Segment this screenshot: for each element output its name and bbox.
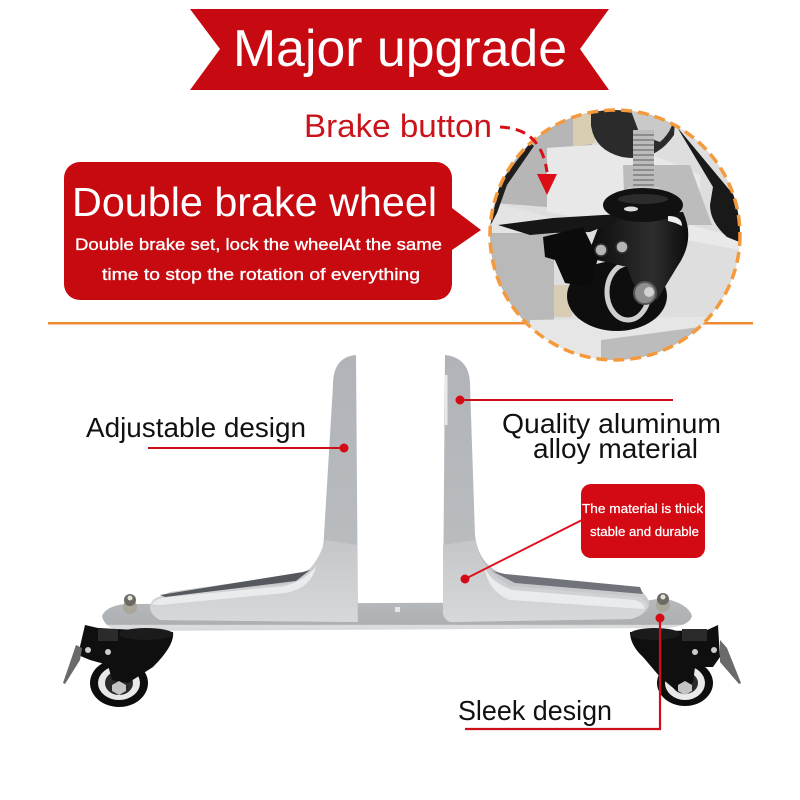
threaded stem — [628, 130, 660, 196]
callout: sleek design: Sleek design — [458, 695, 612, 726]
callout: quality aluminum alloy material — [456, 396, 721, 464]
heading: Double brake wheel — [72, 179, 437, 225]
right caster — [630, 625, 741, 706]
left caster — [63, 625, 173, 707]
dashed orange ring — [490, 110, 740, 360]
callout: material is thick: The material is thick — [582, 501, 704, 516]
callout: material is thick — [460, 484, 705, 584]
callout: quality aluminum alloy material: Quality aluminum — [502, 408, 721, 439]
description text: Double brake set, lock the wheelAt the same — [75, 235, 442, 254]
caster close-up circle — [490, 108, 742, 360]
description text: time to stop the rotation of everything — [102, 265, 420, 284]
title banner: Major upgrade — [233, 20, 567, 78]
callout: material is thick: stable and durable — [590, 524, 699, 539]
callout: quality aluminum alloy material: alloy material — [533, 433, 698, 464]
left bracket — [150, 355, 358, 622]
callout: sleek design — [458, 614, 664, 729]
background wheels — [591, 108, 676, 158]
description text — [75, 235, 442, 284]
panel: double brake wheel — [64, 162, 481, 300]
divider line — [48, 322, 753, 324]
callout: adjustable design — [86, 412, 348, 452]
stand product illustration — [63, 355, 741, 707]
caster wheel — [567, 261, 667, 331]
brake button label: Brake button — [304, 108, 492, 144]
right bolt — [656, 593, 670, 612]
callout: adjustable design: Adjustable design — [86, 412, 306, 443]
caster body and brake — [498, 188, 688, 304]
title banner — [190, 9, 609, 90]
left bolt — [123, 594, 137, 614]
dashed arrow to brake button — [500, 127, 557, 195]
base plate — [102, 598, 692, 631]
right bracket — [443, 355, 649, 622]
